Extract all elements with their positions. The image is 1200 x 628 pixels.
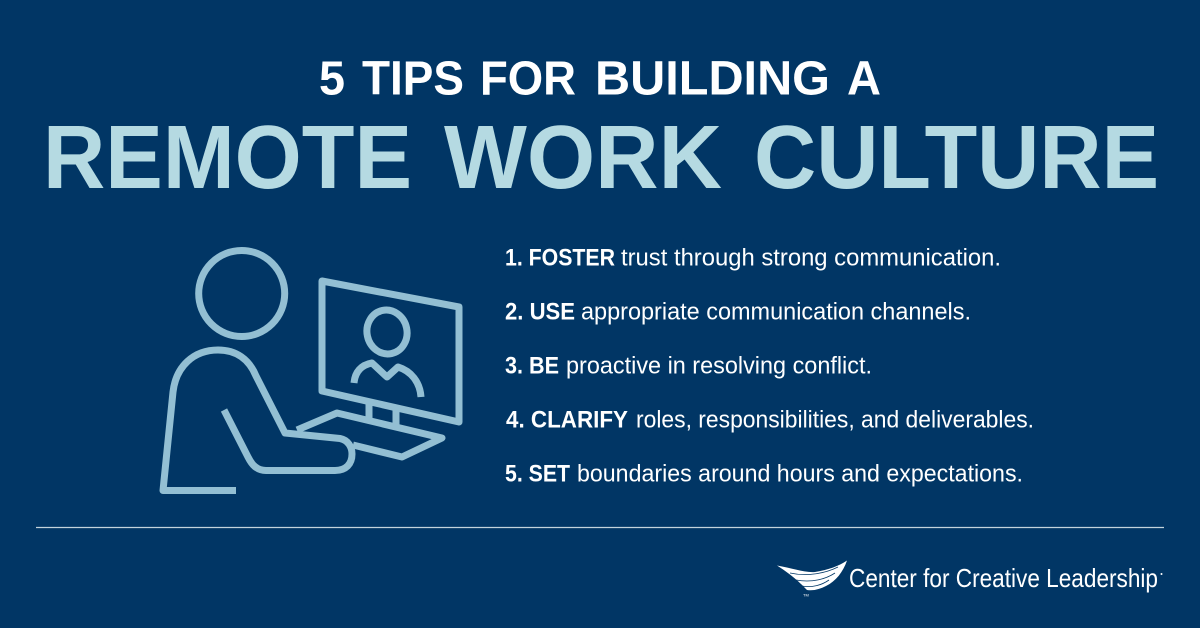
title line 2 bbox=[43, 108, 1159, 208]
title line 1: A bbox=[847, 52, 881, 106]
title line 1: TIPS bbox=[362, 52, 464, 106]
tip 3: proactive in resolving conflict. bbox=[566, 352, 872, 380]
tip 5: boundaries around hours and expectations. bbox=[577, 460, 1023, 488]
icon: keyboard bbox=[297, 413, 442, 457]
logo wordmark: Center for Creative Leadership bbox=[849, 563, 1158, 593]
title line 2: CULTURE bbox=[754, 108, 1159, 208]
tip 5: 5. SET bbox=[505, 460, 570, 488]
tip 3: 3. BE bbox=[505, 352, 559, 380]
title bbox=[43, 52, 1159, 208]
tip 1: trust through strong communication. bbox=[621, 244, 1001, 272]
tip 2: appropriate communication channels. bbox=[581, 298, 971, 326]
title line 1 bbox=[319, 52, 881, 106]
tips list bbox=[505, 244, 1034, 488]
icon: person body and arm bbox=[163, 350, 352, 490]
logo: Center for Creative Leadership bbox=[777, 560, 1162, 598]
icon: monitor stand bbox=[369, 403, 396, 425]
icon: on-screen person shoulders bbox=[354, 363, 421, 397]
icon: wing mark bbox=[777, 560, 847, 598]
tip 2: 2. USE bbox=[505, 298, 575, 326]
icon: person head bbox=[199, 250, 285, 336]
title line 2: REMOTE bbox=[43, 108, 412, 208]
tip 4: 4. CLARIFY bbox=[506, 406, 628, 434]
icon: person at a computer on a video call bbox=[163, 250, 459, 490]
icon: monitor screen bbox=[322, 281, 459, 422]
icon: wing mark: TM bbox=[803, 592, 809, 598]
title line 2: WORK bbox=[444, 108, 722, 208]
tip 4: roles, responsibilities, and deliverables. bbox=[636, 406, 1034, 434]
title line 1: BUILDING bbox=[595, 52, 830, 106]
title line 1: 5 bbox=[319, 52, 345, 106]
icon: on-screen person head bbox=[363, 306, 411, 358]
tip 1: 1. FOSTER bbox=[505, 244, 615, 272]
title line 1: FOR bbox=[480, 52, 576, 106]
